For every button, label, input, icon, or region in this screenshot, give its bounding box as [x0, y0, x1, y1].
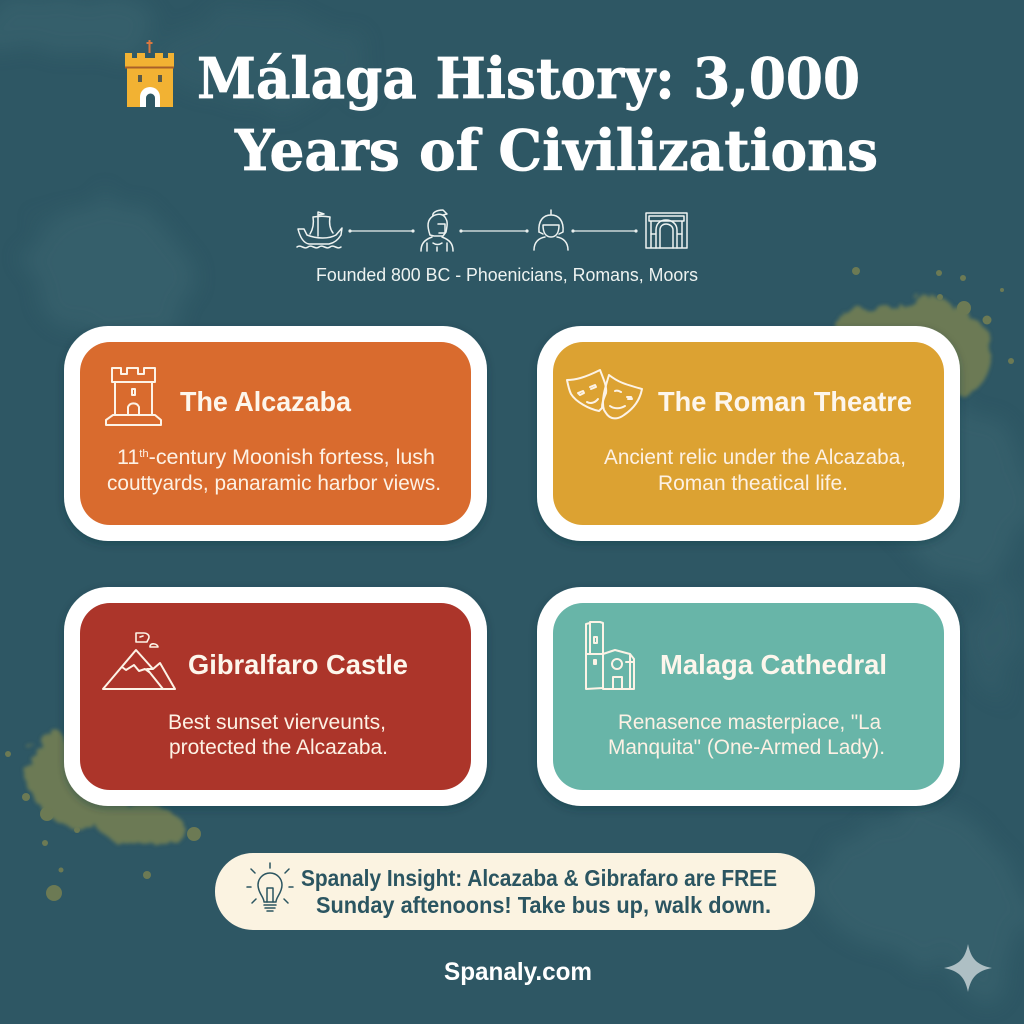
- olive paint splash: upper right: [838, 267, 1014, 390]
- panel: Gibralfaro Castle: [64, 587, 487, 806]
- icon: Roman soldier: [421, 210, 453, 251]
- card heading: Gibralfaro Castle: [188, 649, 408, 680]
- icon: Moorish arch: [646, 213, 687, 248]
- icon: light bulb: [247, 863, 293, 911]
- card body: couttyards, panaramic harbor views.: [107, 472, 441, 495]
- card body: Manquita" (One-Armed Lady).: [608, 736, 885, 759]
- card body: [107, 446, 441, 495]
- card fill: [553, 342, 944, 525]
- timeline of civilizations: [297, 210, 687, 251]
- connector: ship to Roman: [348, 229, 415, 233]
- callout line 2: Sunday aftenoons! Take bus up, walk down.: [316, 892, 771, 918]
- connector: Moor to arch: [571, 229, 638, 233]
- title line 1: Málaga History: 3,000: [197, 46, 860, 112]
- icon: cathedral: [586, 622, 634, 689]
- callout: Spanaly Insight: [215, 853, 815, 930]
- card frame: [64, 326, 487, 541]
- card body: [608, 711, 885, 759]
- card frame: [537, 587, 960, 806]
- title: [125, 40, 878, 184]
- card body: Roman theatical life.: [658, 472, 848, 495]
- card body: [168, 711, 388, 759]
- card frame: [64, 587, 487, 806]
- card body: Ancient relic under the Alcazaba,: [604, 446, 906, 469]
- card fill: [553, 603, 944, 790]
- callout line 1: Spanaly Insight: Alcazaba & Gibrafaro are FREE: [301, 865, 777, 891]
- card fill: [80, 603, 471, 790]
- card body: Best sunset vierveunts,: [168, 711, 386, 734]
- icon: Moorish warrior: [534, 210, 568, 250]
- callout pill: [215, 853, 815, 930]
- icon: theatre masks: [567, 370, 642, 418]
- card body: th: [139, 448, 149, 460]
- connector: Roman to Moor: [459, 229, 529, 233]
- icon: fortress tower: [106, 368, 161, 425]
- card frame: [537, 326, 960, 541]
- footer: website: Spanaly.com: [444, 958, 592, 986]
- panel: Malaga Cathedral: [537, 587, 960, 806]
- card body: -century Moonish fortess, lush: [149, 446, 435, 469]
- card heading: Malaga Cathedral: [660, 649, 887, 680]
- card body: Renasence masterpiace, "La: [618, 711, 881, 734]
- icon: sparkle: [944, 944, 992, 992]
- icon: castle tower: [125, 40, 174, 107]
- title line 2: Years of Civilizations: [234, 118, 878, 184]
- icon: mountain with flag: [103, 633, 175, 689]
- card body: [604, 446, 906, 495]
- card body: 11: [117, 446, 139, 469]
- olive paint splash: lower left: [5, 728, 201, 901]
- panel: The Alcazaba: [64, 326, 487, 541]
- icon: Phoenician ship: [297, 212, 342, 248]
- card fill: [80, 342, 471, 525]
- card heading: The Alcazaba: [180, 386, 351, 417]
- card heading: The Roman Theatre: [658, 386, 912, 417]
- subtitle: Founded 800 BC - Phoenicians, Romans, Moors: [316, 265, 698, 285]
- panel: The Roman Theatre: [537, 326, 960, 541]
- card body: protected the Alcazaba.: [169, 736, 388, 759]
